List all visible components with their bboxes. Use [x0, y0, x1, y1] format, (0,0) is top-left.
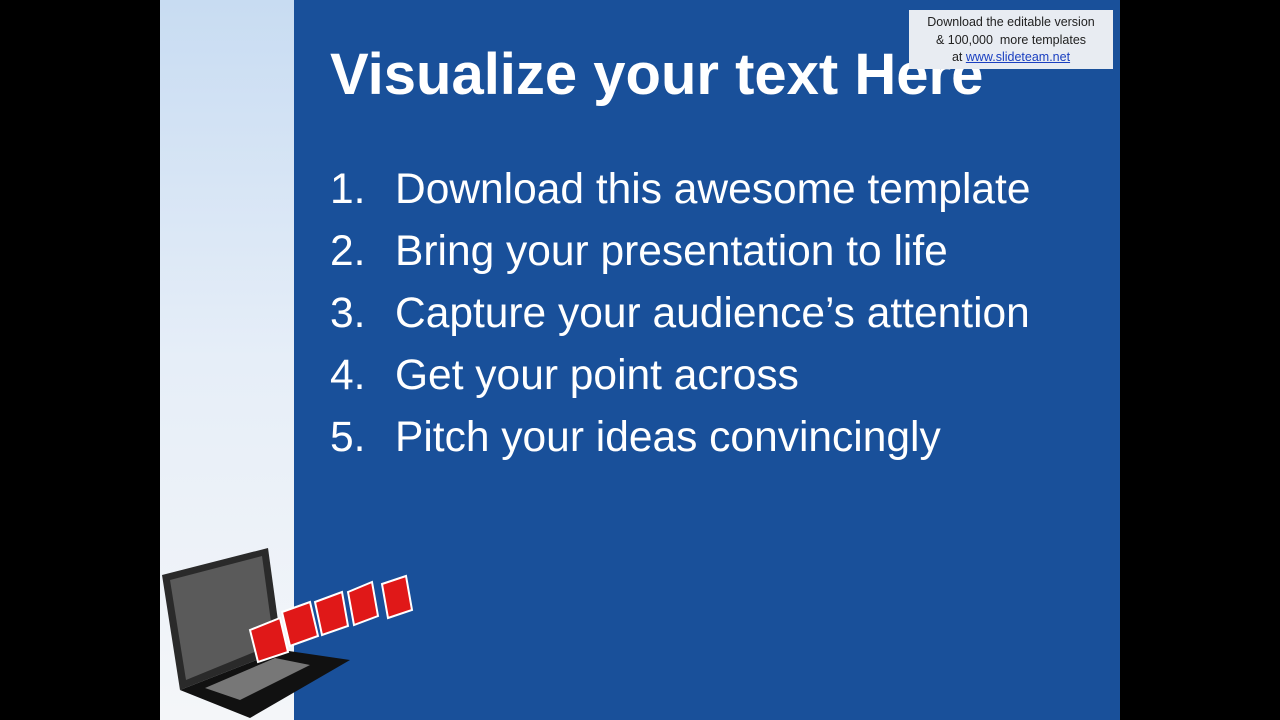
callout: download box: Download the editable version [927, 15, 1095, 29]
title: Visualize your text Here [330, 42, 983, 107]
numbered list: Pitch your ideas convincingly [395, 414, 941, 461]
numbered list: 5. [330, 414, 365, 461]
main blue panel [294, 0, 1120, 720]
numbered list: 1. [330, 166, 365, 213]
numbered list: 4. [330, 352, 365, 399]
numbered list: 2. [330, 228, 365, 275]
numbered list: Capture your audience’s attention [395, 290, 1030, 337]
numbered list: 3. [330, 290, 365, 337]
numbered list: Get your point across [395, 352, 799, 399]
left light panel [160, 0, 294, 720]
callout: download box [909, 10, 1113, 69]
callout: download box: at www.slideteam.net [952, 50, 1070, 64]
numbered list [330, 166, 1030, 461]
callout: download box: & 100,000 more templates [936, 32, 1086, 46]
numbered list: Download this awesome template [395, 166, 1030, 213]
numbered list: Bring your presentation to life [395, 228, 948, 275]
icon: laptop with folders [162, 548, 414, 718]
